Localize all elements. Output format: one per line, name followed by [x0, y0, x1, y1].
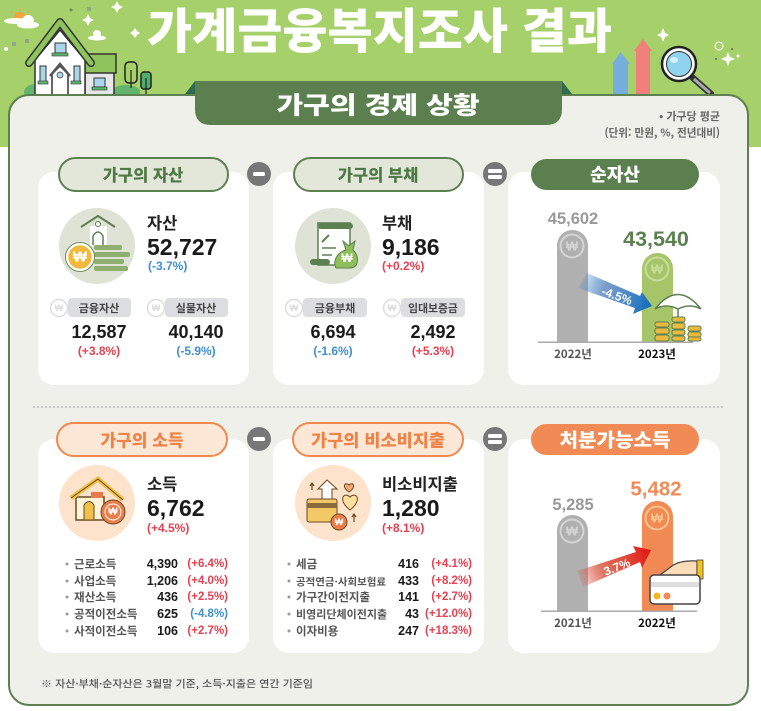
list: expenditure items: 세금	[296, 556, 318, 572]
icon: rising arrows	[612, 39, 652, 94]
icon: magnifying glass	[662, 47, 711, 94]
icon: umbrella and coins	[655, 294, 701, 341]
list: income items: 근로소득	[74, 556, 117, 572]
section banner	[185, 81, 572, 125]
bar 2023	[623, 227, 689, 362]
sub-item: rental deposits: (+5.3%)	[412, 344, 454, 358]
list: income items: 4,390	[147, 557, 178, 571]
header background	[0, 0, 761, 147]
list: income items: 사업소득	[74, 573, 117, 589]
sub-item: financial assets	[50, 298, 131, 358]
sub-item: financial assets: 12,587	[71, 322, 127, 342]
sub-item: rental deposits: ₩	[388, 303, 397, 313]
list: expenditure items	[288, 556, 472, 639]
heading: debt: 가구의 부채	[338, 162, 418, 186]
sub-item: financial debt: 6,694	[310, 322, 356, 342]
figure: expenditure total: (+8.1%)	[382, 521, 424, 535]
bar 2022: 2022년	[638, 615, 676, 631]
section banner: 가구의 경제 상황	[276, 86, 480, 120]
list: income items: (+4.0%)	[187, 575, 228, 587]
divider	[33, 406, 725, 408]
list: expenditure items: (+8.2%)	[431, 575, 472, 587]
operator: minus	[247, 162, 271, 186]
figure: income total: 소득	[147, 471, 177, 495]
bar 2021: ₩	[566, 524, 579, 538]
list: expenditure items: 433	[398, 574, 419, 588]
list: income items: (+2.7%)	[187, 625, 228, 637]
list: expenditure items: 416	[398, 557, 419, 571]
list: income items: 106	[157, 624, 178, 638]
bar 2021: 5,285	[552, 496, 594, 514]
list: expenditure items: 공적연금·사회보험료	[296, 574, 386, 588]
unit note: (단위: 만원, %, 전년대비)	[605, 126, 720, 140]
unit note: • 가구당 평균	[659, 108, 720, 124]
list: income items: 436	[157, 590, 178, 604]
sub-item: real assets: (-5.9%)	[176, 344, 216, 358]
heading: net assets: 순자산	[590, 161, 640, 187]
baseline	[541, 610, 697, 612]
sub-item: financial assets: 금융자산	[79, 300, 119, 316]
list: income items: 1,206	[147, 574, 178, 588]
icon: hand holding card	[650, 560, 703, 604]
sub-item: financial assets: ₩	[55, 303, 64, 313]
operator: equals	[483, 162, 507, 186]
bar 2021: 2021년	[554, 615, 592, 631]
icon: house and trees	[24, 22, 151, 100]
icon: sun and clouds	[4, 8, 106, 40]
icon: house with coin: ₩	[108, 506, 118, 518]
panel: household assets	[38, 158, 249, 385]
baseline	[538, 342, 693, 343]
sub-item: financial debt	[286, 298, 367, 358]
sub-item: real assets: 실물자산	[176, 300, 216, 316]
operator: minus	[247, 427, 271, 451]
sub-item: rental deposits	[384, 298, 465, 358]
bar 2022: ₩	[566, 238, 579, 254]
list: expenditure items: 비영리단체이전지출	[296, 606, 387, 622]
icon: document and money bag: ₩	[341, 251, 353, 265]
sparkles right	[657, 28, 740, 66]
heading: non-consumption expenditure	[293, 423, 463, 456]
sub-item: rental deposits: 2,492	[410, 322, 456, 342]
bar 2022: 45,602	[548, 210, 598, 228]
heading: debt	[294, 158, 463, 191]
footnote: ※ 자산·부채·순자산은 3월말 기준, 소득·지출은 연간 기준임	[41, 676, 313, 690]
arrow: -4.5% decrease	[578, 273, 652, 314]
bar 2021	[552, 496, 594, 631]
heading: income: 가구의 소득	[101, 426, 184, 452]
icon: card and hearts	[295, 465, 371, 541]
list: expenditure items: (+4.1%)	[431, 558, 472, 570]
panel: household debt	[273, 158, 484, 385]
panel: non-consumption expenditure	[273, 423, 484, 653]
icon: card and hearts: ₩	[335, 517, 344, 527]
heading: disposable income	[531, 424, 699, 455]
figure: assets total	[147, 210, 217, 273]
bar 2022	[548, 210, 598, 362]
list: expenditure items: 141	[398, 590, 419, 604]
heading: non-consumption expenditure: 가구의 비소비지출	[311, 426, 445, 452]
bar 2023: ₩	[651, 262, 664, 276]
bar 2023: 2023년	[638, 346, 676, 362]
figure: debt total: 부채	[382, 210, 412, 234]
sub-item: financial debt: 금융부채	[315, 300, 355, 316]
panel: net assets	[508, 159, 720, 385]
sub-item: real assets	[148, 298, 228, 358]
sparkles left	[4, 1, 140, 51]
bar 2022	[630, 478, 682, 631]
bar 2023: 43,540	[623, 227, 689, 251]
list: expenditure items: 43	[405, 607, 419, 621]
operator: equals	[483, 427, 507, 451]
sub-item: real assets: 40,140	[168, 322, 224, 342]
list: income items: 공적이전소득	[74, 606, 138, 622]
sub-item: financial debt: ₩	[290, 303, 299, 313]
list: expenditure items: 이자비용	[296, 623, 339, 639]
arrow: 3.7% increase	[577, 546, 651, 587]
list: expenditure items: (+18.3%)	[425, 625, 472, 637]
icon: house with coins: ₩	[73, 248, 88, 266]
bar 2022: 5,482	[630, 478, 682, 500]
sub-item: real assets: ₩	[152, 303, 161, 313]
bar 2022: 2022년	[554, 346, 592, 362]
sub-item: financial assets: (+3.8%)	[78, 344, 120, 358]
figure: debt total: (+0.2%)	[382, 259, 424, 273]
figure: income total: 6,762	[147, 495, 205, 521]
list: income items: 625	[157, 607, 178, 621]
figure: expenditure total	[382, 471, 458, 535]
heading: assets	[59, 158, 228, 191]
icon: document and money bag	[295, 208, 371, 284]
arrow: -4.5% decrease: -4.5%	[600, 284, 634, 308]
icon: house with coins	[59, 208, 135, 284]
list: income items	[66, 556, 228, 639]
list: expenditure items: 가구간이전지출	[296, 589, 370, 605]
figure: income total	[147, 471, 205, 535]
figure: assets total: (-3.7%)	[148, 259, 187, 273]
list: expenditure items: 247	[398, 624, 419, 638]
list: income items: (-4.8%)	[190, 608, 228, 620]
figure: assets total: 자산	[147, 210, 177, 234]
figure: expenditure total: 비소비지출	[382, 471, 458, 495]
panel: household income	[38, 423, 249, 653]
list: income items: 재산소득	[74, 589, 117, 605]
heading: disposable income: 처분가능소득	[560, 426, 670, 452]
unit note	[605, 108, 720, 140]
arrow: 3.7% increase: 3.7%	[602, 555, 633, 579]
heading: income	[57, 423, 227, 456]
sub-item: financial debt: (-1.6%)	[313, 344, 353, 358]
list: income items: (+2.5%)	[187, 591, 228, 603]
heading: net assets	[531, 159, 699, 190]
heading: assets: 가구의 자산	[103, 162, 183, 186]
icon: house with coin	[59, 465, 135, 541]
sub-item: rental deposits: 임대보증금	[408, 300, 458, 316]
list: expenditure items: (+2.7%)	[431, 591, 472, 603]
list: expenditure items: (+12.0%)	[425, 608, 472, 620]
figure: income total: (+4.5%)	[147, 521, 189, 535]
panel: disposable income	[508, 424, 720, 653]
list: income items: (+6.4%)	[187, 558, 228, 570]
figure: assets total: 52,727	[147, 234, 217, 260]
figure: debt total: 9,186	[382, 234, 440, 260]
list: income items: 사적이전소득	[74, 623, 138, 639]
bar 2022: ₩	[651, 510, 664, 526]
figure: expenditure total: 1,280	[382, 495, 440, 521]
figure: debt total	[382, 210, 440, 273]
